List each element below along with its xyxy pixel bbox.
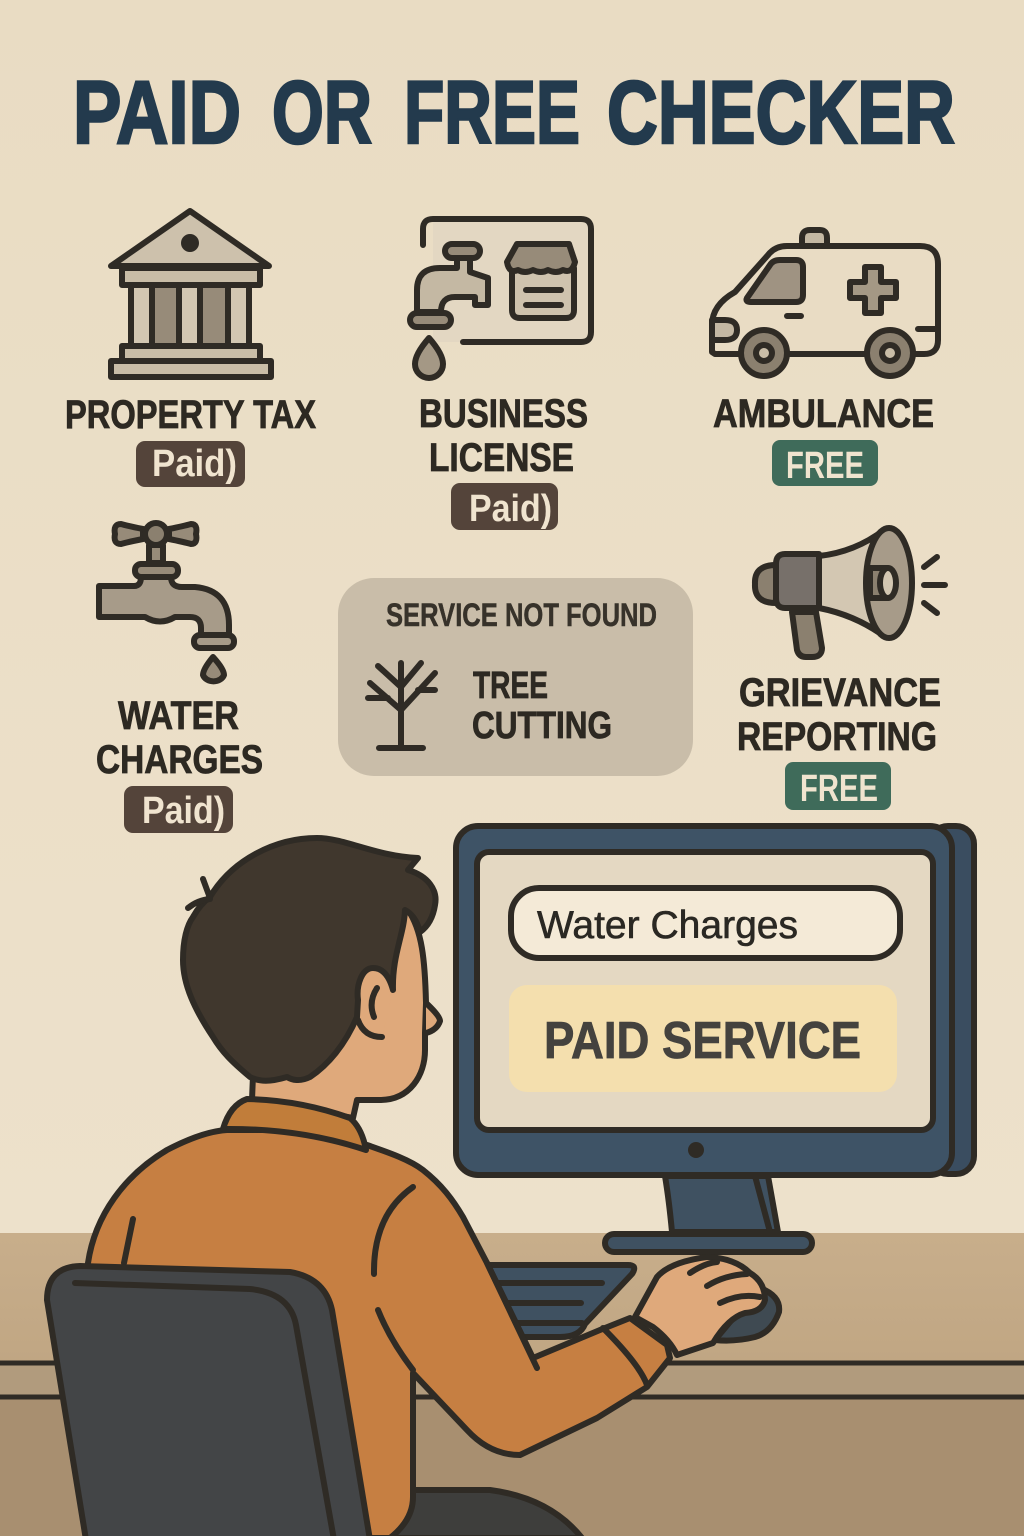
hair [183, 838, 436, 1081]
label: business license [419, 392, 588, 480]
panel: service not found [338, 578, 693, 776]
hand [635, 1257, 765, 1355]
desk [0, 1233, 1024, 1536]
icon: business license [410, 219, 591, 378]
panel heading: SERVICE NOT FOUND [386, 597, 657, 633]
label: water charges: WATER [118, 694, 239, 738]
label: business license: LICENSE [429, 436, 574, 480]
result: paid service: PAID SERVICE [544, 1012, 861, 1070]
badge: grievance free [785, 762, 891, 810]
monitor stand [605, 1176, 812, 1252]
badge: ambulance free: FREE [786, 445, 864, 487]
icon: property tax building [111, 211, 271, 377]
result: paid service [509, 985, 897, 1092]
keyboard [485, 1265, 634, 1337]
icon: ambulance [712, 230, 938, 376]
mouse [715, 1288, 779, 1341]
title [73, 62, 955, 162]
badge: grievance free: FREE [800, 768, 878, 810]
shirt creases [124, 1187, 647, 1385]
label: ambulance: AMBULANCE [713, 392, 934, 436]
badge: business license paid: Paid) [469, 488, 552, 530]
icon: water tap [99, 523, 234, 681]
search box: Water Charges [537, 904, 798, 947]
label: tree cutting: CUTTING [472, 705, 612, 747]
shirt body [88, 1130, 670, 1536]
monitor [456, 826, 974, 1175]
title: PAID [73, 62, 241, 162]
icon: megaphone [755, 528, 945, 657]
label: water charges: CHARGES [96, 738, 263, 782]
icon: tree [368, 663, 435, 748]
title: FREE [404, 62, 580, 162]
neck and face [252, 910, 426, 1118]
label: property tax: PROPERTY TAX [65, 393, 316, 437]
chair [47, 1266, 370, 1536]
monitor screen [477, 852, 933, 1130]
person [47, 838, 765, 1536]
title: OR [272, 62, 372, 162]
label: tree cutting: TREE [473, 665, 548, 707]
nose [426, 1003, 440, 1033]
trousers [380, 1490, 582, 1536]
camera dot [688, 1142, 704, 1158]
label: tree cutting [472, 665, 612, 747]
collar [223, 1099, 366, 1150]
search box [511, 888, 900, 958]
badge: property tax paid: Paid) [152, 443, 237, 485]
label: grievance reporting [737, 671, 941, 759]
label: water charges [96, 694, 263, 782]
label: grievance reporting: GRIEVANCE [739, 671, 941, 715]
badge: water charges paid: Paid) [142, 790, 225, 832]
label: grievance reporting: REPORTING [737, 715, 937, 759]
label: business license: BUSINESS [419, 392, 588, 436]
ear [357, 968, 393, 1037]
